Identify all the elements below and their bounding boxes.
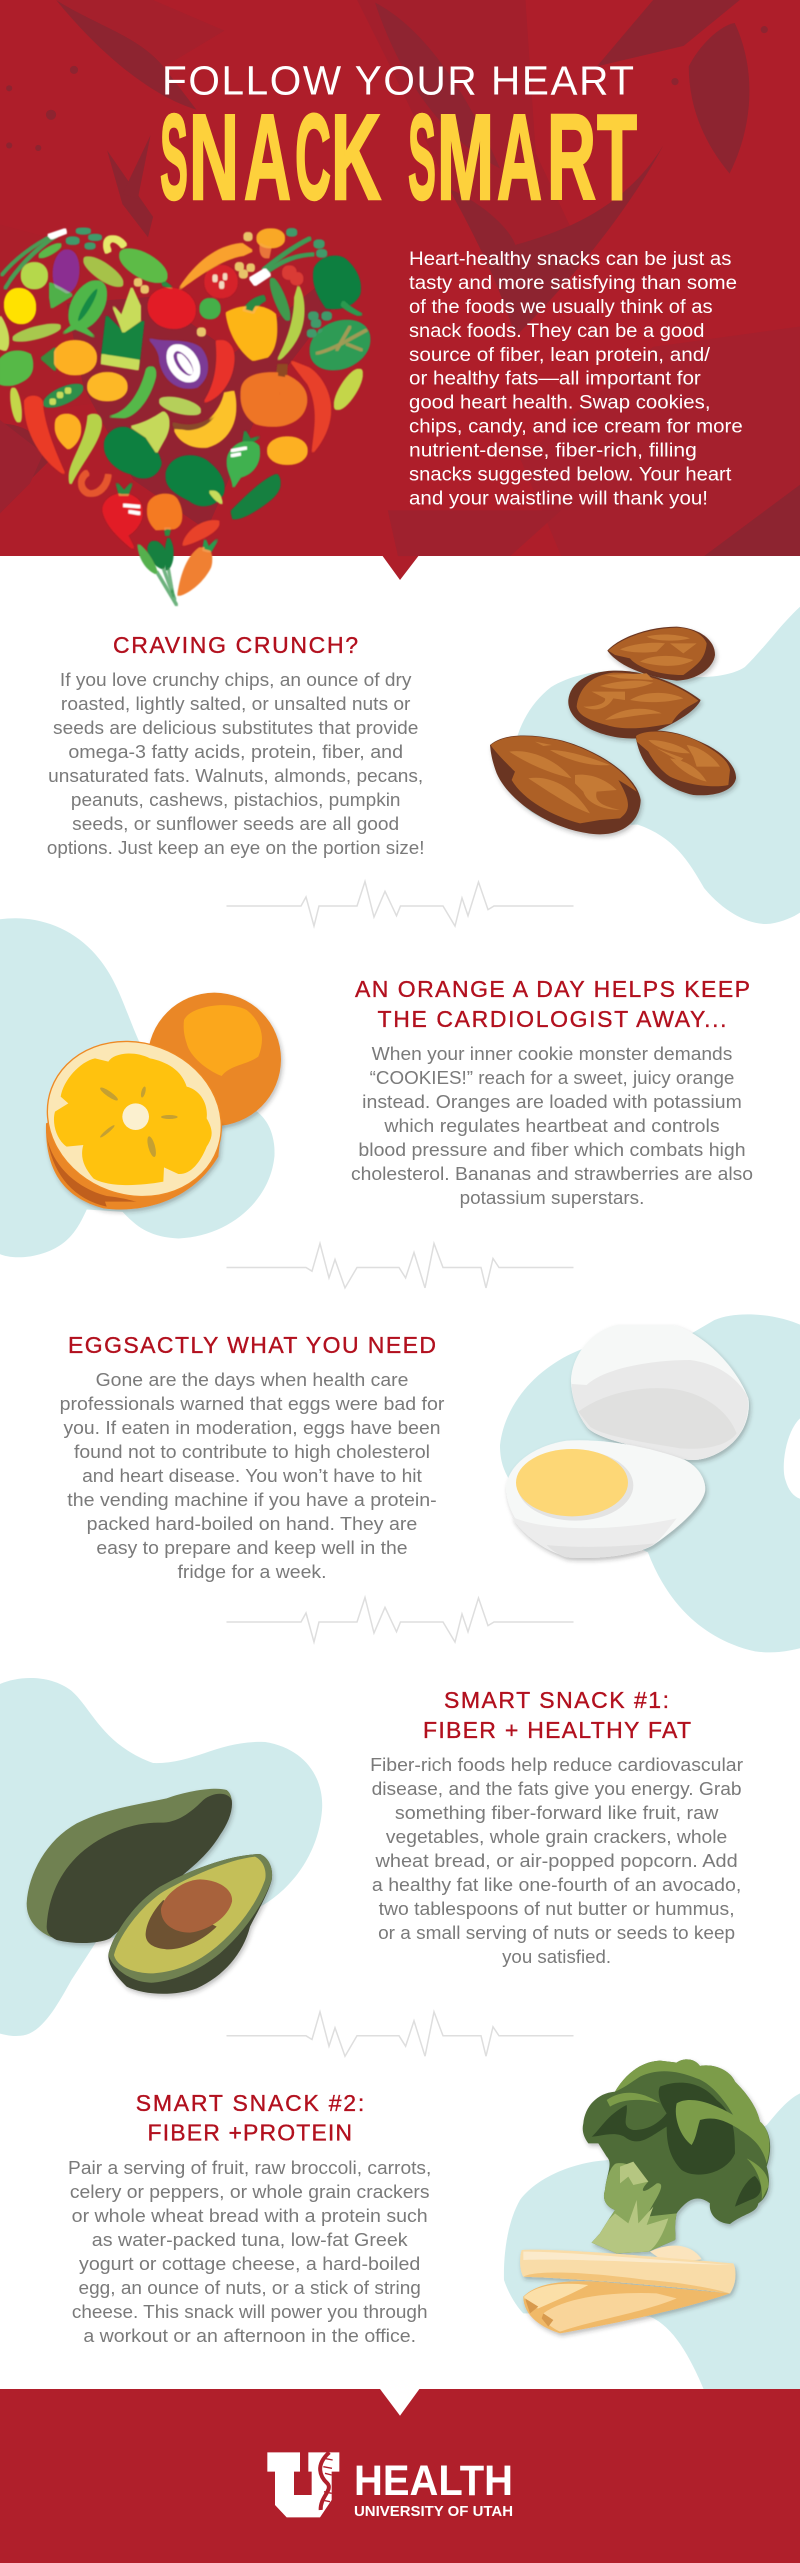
text: egg body: fridge for a week. [178, 1561, 326, 1582]
intro text: snacks suggested below. Your heart [409, 464, 732, 486]
heading: smart snack 1 [423, 1687, 691, 1743]
icon: broccoli [583, 2059, 770, 2253]
text: smart snack 2 body: cheese. This snack will power you through [72, 2301, 428, 2322]
text: smart snack 1 body: or a small serving of nuts or seeds to keep [378, 1922, 735, 1943]
text: orange body: potassium superstars. [460, 1187, 644, 1208]
heading: smart snack 1: FIBER + HEALTHY FAT [423, 1717, 691, 1743]
intro text: nutrient-dense, fiber-rich, filling [409, 440, 697, 462]
text: smart snack 2 body: yogurt or cottage cheese, a hard-boiled [79, 2253, 420, 2274]
title: snack smart: K [331, 89, 381, 225]
text: orange body: “COOKIES!” reach for a sweet, juicy orange [370, 1067, 734, 1088]
text: craving crunch body: roasted, lightly salted, or unsalted nuts or [61, 693, 410, 714]
title: snack smart: A [497, 89, 542, 225]
heading: smart snack 2: FIBER +PROTEIN [148, 2120, 352, 2146]
text: craving crunch body: seeds, or sunflower seeds are all good [72, 813, 399, 834]
text: egg body: the vending machine if you have a protein- [67, 1489, 437, 1510]
text: orange body: cholesterol. Bananas and strawberries are also [351, 1163, 753, 1184]
intro text: of the foods we usually think of as [409, 297, 713, 318]
blob: teal background [500, 1314, 800, 1652]
intro text: source of fiber, lean protein, and/ [409, 345, 711, 366]
text: orange body: instead. Oranges are loaded with potassium [362, 1091, 742, 1112]
text: orange body: When your inner cookie monster demands [372, 1043, 732, 1064]
divider: heartbeat line 4 [226, 2012, 574, 2056]
divider: heartbeat line 2 [226, 1244, 574, 1288]
icon: oranges [25, 993, 281, 1221]
blob: teal background [510, 607, 800, 924]
panel: orange [0, 918, 275, 1257]
text: egg body [60, 1369, 444, 1582]
text: craving crunch body: omega-3 fatty acids, protein, fiber, and [68, 741, 403, 762]
logo: university of utah health [267, 2452, 513, 2520]
text: craving crunch body [47, 669, 424, 858]
icon: block U with DNA helix [267, 2452, 339, 2517]
text: smart snack 1 body: something fiber-forward like fruit, raw [395, 1802, 719, 1823]
divider: heartbeat line 3 [226, 1598, 574, 1642]
text: smart snack 1 body: disease, and the fats give you energy. Grab [372, 1778, 742, 1799]
text: smart snack 1 body: a healthy fat like one-fourth of an avocado, [372, 1874, 741, 1895]
text: smart snack 1 body: wheat bread, or air-popped popcorn. Add [374, 1850, 738, 1871]
heading: craving crunch: CRAVING CRUNCH? [113, 632, 358, 658]
heading: orange: AN ORANGE A DAY HELPS KEEP [355, 976, 750, 1002]
divider: heartbeat line 1 [226, 882, 574, 926]
text: egg body: easy to prepare and keep well in the [96, 1537, 408, 1558]
text: craving crunch body: unsaturated fats. Walnuts, almonds, pecans, [48, 765, 423, 786]
text: egg body: packed hard-boiled on hand. They are [87, 1513, 417, 1534]
intro text: good heart health. Swap cookies, [409, 392, 710, 414]
text: egg body: professionals warned that eggs were bad for [60, 1393, 444, 1414]
text: craving crunch body: options. Just keep an eye on the portion size! [47, 837, 424, 858]
intro text: chips, candy, and ice cream for more [409, 416, 743, 438]
text: craving crunch body: seeds are delicious substitutes that provide [53, 717, 418, 738]
header panel [0, 0, 800, 580]
panel: avocado [0, 1678, 322, 2036]
heading: smart snack 2: SMART SNACK #2: [136, 2090, 364, 2116]
text: smart snack 1 body: you satisfied. [502, 1946, 611, 1967]
text: smart snack 1 body [370, 1754, 743, 1967]
title: snack smart: A [244, 89, 291, 225]
title: snack smart: T [597, 89, 637, 225]
panel: egg [500, 1314, 800, 1652]
text: orange body: which regulates heartbeat and controls [383, 1115, 720, 1136]
intro text [409, 249, 743, 510]
title: snack smart: M [437, 89, 494, 225]
text: smart snack 2 body: Pair a serving of fruit, raw broccoli, carrots, [68, 2157, 431, 2178]
footer panel [0, 2389, 800, 2563]
text: egg body: you. If eaten in moderation, eggs have been [64, 1417, 440, 1438]
icon: string cheese [520, 2246, 736, 2333]
text: smart snack 1 body: vegetables, whole grain crackers, whole [386, 1826, 727, 1847]
intro text: tasty and more satisfying than some [409, 273, 737, 294]
text: craving crunch body: peanuts, cashews, pistachios, pumpkin [71, 789, 400, 810]
text: smart snack 2 body [68, 2157, 431, 2346]
intro text: Heart-healthy snacks can be just as [409, 249, 731, 270]
heading: smart snack 2 [136, 2090, 364, 2146]
heading: smart snack 1: SMART SNACK #1: [444, 1687, 669, 1713]
text: egg body: found not to contribute to high cholesterol [74, 1441, 430, 1462]
title: snack smart: S [408, 89, 436, 225]
icon: vegetable heart [0, 228, 377, 605]
heading: orange [355, 976, 750, 1032]
heading: orange: THE CARDIOLOGIST AWAY... [378, 1006, 726, 1032]
text: smart snack 2 body: or whole wheat bread with a protein such [72, 2205, 428, 2226]
icon: avocados [27, 1789, 272, 1994]
panel: broccoli and cheese [504, 2093, 800, 2390]
title: snack smart: N [189, 89, 239, 225]
intro text: snack foods. They can be a good [409, 321, 704, 342]
text: smart snack 2 body: as water-packed tuna, low-fat Greek [92, 2229, 408, 2250]
text: smart snack 2 body: egg, an ounce of nuts, or a stick of string [79, 2277, 421, 2298]
title: snack smart: S [160, 89, 188, 225]
wordmark: health: HEALTH [354, 2457, 513, 2505]
blob: teal background [0, 1678, 322, 2036]
icon: almonds [490, 627, 736, 834]
panel: craving crunch [510, 607, 800, 924]
blob: teal background [0, 918, 275, 1257]
intro text: and your waistline will thank you! [409, 488, 708, 510]
intro text: or healthy fats—all important for [409, 368, 702, 390]
text: orange body [351, 1043, 753, 1208]
text: smart snack 1 body: Fiber-rich foods help reduce cardiovascular [370, 1754, 743, 1775]
text: smart snack 2 body: celery or peppers, or whole grain crackers [70, 2181, 430, 2202]
title: follow your heart: FOLLOW YOUR HEART [162, 58, 634, 104]
icon: boiled eggs [506, 1325, 749, 1558]
text: smart snack 2 body: a workout or an afternoon in the office. [83, 2325, 416, 2346]
title: snack smart: C [295, 89, 331, 225]
blob: teal background [504, 2093, 800, 2390]
text: egg body: Gone are the days when health care [96, 1369, 408, 1390]
text: egg body: and heart disease. You won’t have to hit [82, 1465, 422, 1486]
text: orange body: blood pressure and fiber which combats high [358, 1139, 746, 1160]
title: snack smart: R [547, 89, 596, 225]
heading: eggsactly: EGGSACTLY WHAT YOU NEED [68, 1332, 436, 1358]
wordmark: university of utah: UNIVERSITY OF UTAH [354, 2504, 513, 2520]
text: craving crunch body: If you love crunchy chips, an ounce of dry [60, 669, 412, 690]
text: smart snack 1 body: two tablespoons of nut butter or hummus, [379, 1898, 735, 1919]
